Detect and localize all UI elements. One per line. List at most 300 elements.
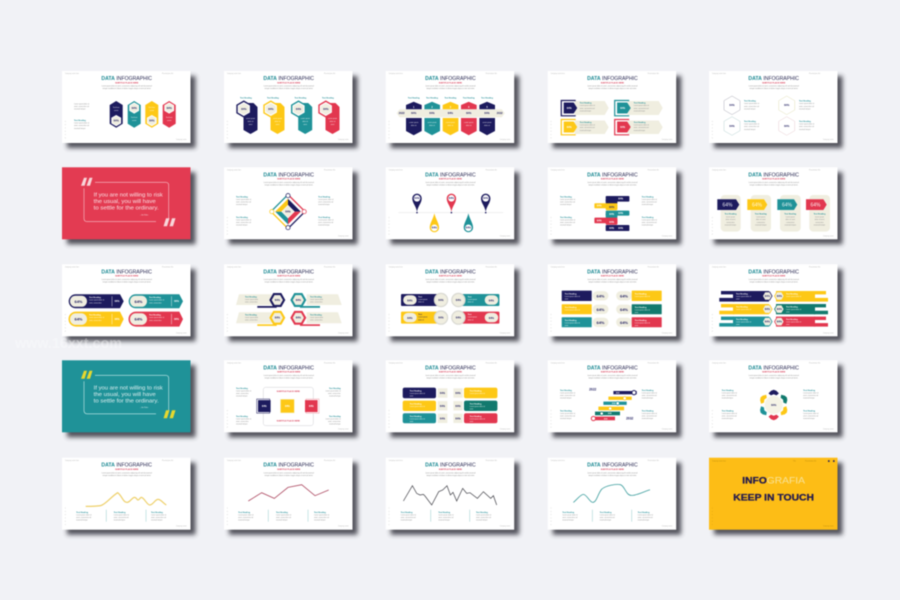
teal column: 2	[431, 106, 433, 109]
slide header: Lorem ipsum dolor sit amet, consectetur adipiscing elit sed do eiusmod	[587, 181, 638, 184]
text block top right: eiusmod tempor	[642, 203, 654, 206]
card teal: eiusmod tempor	[785, 224, 796, 227]
card yellow: consectetur	[757, 221, 765, 224]
diamond chart: 64%	[285, 210, 291, 214]
pill yellow: Lorem ipsum dolor sit	[89, 316, 105, 319]
right bars	[464, 388, 497, 423]
slide header: Company name here	[389, 459, 403, 462]
slide header: Presentation title	[809, 361, 820, 364]
item navy: Lorem ipsum dolor	[245, 299, 259, 301]
text column two: Text Heading	[276, 511, 289, 514]
text block top left: amet, consectetur ad	[722, 394, 737, 397]
left bars: Text Heading	[410, 402, 422, 405]
right bars: Lorem ipsum dolor sit	[786, 308, 802, 311]
bar red	[452, 311, 499, 324]
slide header	[227, 266, 349, 334]
text block bottom right: Lorem ipsum dolor sit	[325, 417, 341, 420]
slide header: SUBTITLE PLACE HERE	[439, 371, 463, 374]
red column	[461, 97, 477, 135]
text block bottom left: Lorem ipsum dolor sit	[722, 412, 737, 415]
hexagon item one	[724, 96, 760, 115]
slide header: SUBTITLE PLACE HERE	[601, 178, 625, 181]
text block bottom left: Lorem ipsum dolor sit	[236, 417, 252, 420]
bar yellow	[401, 311, 448, 324]
quote text: If you are not willing to risk	[94, 385, 163, 391]
hexagon item four: Lorem ipsum dolor sit	[799, 123, 815, 126]
slide: stair timeline	[548, 360, 681, 437]
line chart	[86, 493, 166, 506]
hexagon item two: 64%	[784, 103, 790, 107]
text block top right	[642, 389, 657, 400]
teal column: Lorem ipsum	[427, 122, 437, 124]
year labels: 2032	[497, 111, 503, 115]
card yellow: eiusmod tempor	[755, 224, 767, 227]
left percentages: 64%	[596, 320, 605, 325]
small header text: Company name	[823, 526, 834, 528]
quote text	[94, 192, 163, 216]
text column two	[592, 510, 615, 522]
card yellow: dolor sit amet	[756, 218, 766, 221]
right percentages	[453, 388, 463, 423]
slide header: Company name here	[712, 72, 726, 75]
slide header: SUBTITLE PLACE HERE	[601, 275, 625, 278]
right bars	[632, 291, 662, 327]
text column one: eiusmod tempor	[562, 519, 574, 522]
pin red: 64%	[449, 196, 455, 200]
yellow column: dolor sit	[448, 124, 454, 127]
item teal: 64%	[620, 107, 626, 110]
text column three: Lorem ipsum dolor sit	[476, 514, 492, 517]
bar yellow: 64%	[438, 315, 444, 319]
slide header: Lorem ipsum dolor sit amet, consectetur adipiscing elit sed do eiusmod	[749, 181, 799, 184]
column red	[318, 97, 340, 134]
slide header: tempor incididunt ut labore et dolore magna aliqua ut enim ad minim	[588, 376, 637, 379]
left bars: Lorem ipsum dolor sit	[736, 308, 752, 311]
text block bottom left: Text Heading	[236, 415, 249, 418]
text block bottom left: eiusmod tempor	[236, 224, 248, 227]
text column two: amet, consectetur ad	[600, 516, 615, 519]
pill navy: 64%	[74, 299, 83, 304]
column navy	[236, 97, 258, 134]
text column one: eiusmod tempor	[238, 519, 250, 522]
slide header: SUBTITLE PLACE HERE	[601, 468, 625, 471]
left bars: Lorem ipsum dolor sit	[410, 418, 425, 421]
slide: hexagon headed columns	[224, 71, 358, 148]
square red: 64%	[309, 405, 315, 408]
title: DATA INFOGRAPHIC	[425, 269, 476, 275]
slide header: Company name	[500, 526, 510, 528]
slide header: tempor incididunt ut labore et dolore magna aliqua ut enim ad minim	[588, 474, 637, 477]
slide header: Presentation title	[809, 72, 820, 75]
frame	[263, 387, 313, 426]
slide header: Company name	[823, 332, 834, 334]
slide: hexagon badges with bands	[224, 264, 358, 341]
pill teal: Lorem ipsum dolor sit	[149, 299, 165, 302]
slide header: Lorem ipsum dolor sit amet, consectetur adipiscing elit sed do eiusmod	[264, 278, 314, 281]
text block top right	[803, 389, 819, 400]
year labels	[399, 111, 503, 115]
right bars: Text Heading	[470, 415, 482, 418]
text block bottom right: Text Heading	[318, 216, 331, 219]
card yellow: Text Heading	[755, 212, 768, 215]
slide header: tempor incididunt ut labore et dolore magna aliqua ut enim ad minim	[750, 280, 798, 283]
slide header: Company name here	[712, 265, 726, 268]
text column one	[76, 511, 92, 522]
column red: Lorem ipsum	[328, 118, 338, 120]
slide header: tempor incididunt ut labore et dolore magna aliqua ut enim ad minim	[103, 474, 151, 477]
slide header	[551, 362, 672, 430]
text block bottom right: eiusmod tempor	[642, 224, 654, 227]
text column one	[238, 511, 254, 522]
title: DATA INFOGRAPHIC	[748, 269, 799, 275]
title: DATA INFOGRAPHIC	[425, 76, 476, 82]
slide header: Company name	[662, 235, 672, 237]
item navy: amet, consectetur ad	[580, 107, 595, 110]
title: DATA INFOGRAPHIC	[101, 76, 152, 82]
text block bottom left: amet, consectetur	[236, 420, 249, 423]
slide header: Company name	[338, 235, 349, 237]
hexagon item four: 64%	[784, 124, 790, 128]
slide header: Presentation title	[486, 361, 497, 364]
slide header	[227, 72, 349, 141]
right bars: Text Heading	[635, 319, 647, 322]
slide header: Presentation title	[324, 265, 335, 268]
hexagon item two	[779, 96, 815, 115]
title: DATA INFOGRAPHIC	[587, 76, 638, 82]
column yellow	[263, 97, 284, 134]
navy column two: 5	[486, 106, 488, 109]
square yellow: 64%	[285, 405, 291, 408]
hexagon item four: amet, consectetur ad	[799, 125, 814, 128]
text column two: eiusmod tempor	[438, 519, 450, 522]
text block top right: amet, consectetur	[328, 392, 341, 395]
text block top left: eiusmod tempor	[560, 397, 572, 400]
text column two: eiusmod tempor	[276, 519, 288, 522]
text block top right: eiusmod tempor	[329, 394, 341, 397]
slide header: Company name	[338, 428, 349, 430]
pill navy: amet, consectetur	[89, 301, 102, 304]
text block bottom right	[803, 409, 819, 420]
left bars: Lorem ipsum dolor sit	[565, 295, 580, 298]
text column three: eiusmod tempor	[638, 519, 650, 522]
slide header	[389, 266, 510, 334]
pin navy: 64%	[414, 196, 420, 200]
left bars: amet	[736, 297, 740, 300]
text block bottom right: Lorem ipsum dolor sit	[318, 218, 334, 221]
text column one: Text Heading	[401, 511, 413, 514]
text block top right: Lorem ipsum dolor sit	[803, 391, 819, 394]
slide header	[227, 459, 349, 528]
card yellow	[747, 195, 771, 232]
text block bottom left	[236, 415, 252, 425]
text block bottom right	[642, 409, 657, 420]
ribbon stack: 64%	[609, 213, 615, 216]
text column two: Text Heading	[438, 511, 451, 514]
text block top left	[722, 389, 737, 400]
text block bottom right: amet, consectetur ad	[642, 221, 657, 224]
slide header: Company name here	[227, 169, 241, 172]
text block top left: eiusmod tempor	[236, 394, 248, 397]
quote text	[94, 385, 163, 409]
text block top left: Text Heading	[236, 387, 249, 390]
slide header: Lorem ipsum dolor sit amet, consectetur adipiscing elit sed do eiusmod	[749, 374, 799, 377]
hexagon bars: 64%	[114, 118, 119, 122]
year labels: 2032	[626, 416, 633, 420]
slide header: SUBTITLE PLACE HERE	[277, 275, 301, 278]
bar teal	[452, 293, 499, 307]
text block bottom left	[560, 216, 576, 227]
text block bottom left: Text Heading	[722, 409, 734, 412]
left percentages: 64%	[440, 391, 446, 395]
item navy: Text Heading	[245, 295, 258, 298]
text block bottom left: eiusmod tempor	[560, 224, 572, 227]
text block bottom right: Text Heading	[803, 409, 816, 412]
yellow column: Lorem ipsum	[446, 122, 456, 124]
left percentages: 64%	[440, 416, 446, 420]
hexagon bars: Text here	[166, 116, 173, 119]
card red: consectetur	[815, 221, 824, 224]
ribbon stack: 64%	[618, 212, 624, 215]
column teal: Text Heading	[294, 97, 307, 100]
bar yellow: dolor sit	[418, 318, 424, 321]
hexagon bars: Text here	[149, 106, 155, 109]
ribbon stack: 64%	[609, 205, 615, 209]
hexagon item two: Text Heading	[799, 100, 812, 102]
text block bottom left: amet, consectetur ad	[236, 221, 251, 224]
hexagon bars: Lorem	[167, 120, 172, 122]
right bars: Text Heading	[786, 318, 799, 321]
pill red: Lorem ipsum dolor sit	[149, 316, 165, 319]
slide: red line chart	[224, 458, 358, 535]
contact dots	[828, 460, 835, 462]
hex badges: 64%	[777, 294, 783, 298]
year labels: 2022	[399, 111, 405, 115]
text block bottom right	[642, 216, 657, 227]
pill navy: Lorem ipsum dolor sit	[89, 299, 105, 302]
slide header: tempor incididunt ut labore et dolore magna aliqua ut enim ad minim	[426, 184, 475, 187]
hex badges: 64%	[777, 319, 783, 323]
title: DATA INFOGRAPHIC	[101, 269, 152, 275]
quote frame left	[84, 188, 156, 222]
text block bottom left	[236, 216, 252, 227]
left bars: Text Heading	[736, 292, 749, 295]
hex badges: 64%	[765, 319, 771, 323]
item yellow: amet, consectetur	[245, 318, 258, 321]
slide: bars with ring circles	[386, 264, 519, 341]
column teal: 64%	[296, 107, 302, 111]
slide header: Company name	[176, 332, 187, 334]
slide header: Company name here	[389, 72, 403, 75]
line chart	[248, 485, 329, 501]
pill yellow	[68, 312, 124, 327]
navy column: Lorem ipsum	[409, 122, 419, 124]
item yellow: Text Heading	[245, 313, 258, 316]
card red: dolor sit amet	[815, 218, 825, 221]
slide header: Company name here	[65, 265, 79, 268]
title: DATA INFOGRAPHIC	[425, 365, 476, 371]
item yellow	[561, 120, 609, 135]
text column three	[470, 510, 492, 522]
card navy: consectetur	[726, 221, 735, 224]
ribbon stack: 64%	[597, 205, 602, 208]
slide header: Company name	[823, 235, 834, 237]
text block top left: amet, consectetur ad	[236, 201, 251, 204]
title: DATA INFOGRAPHIC	[425, 463, 476, 469]
navy column two: 64%	[484, 111, 490, 115]
slide header: Lorem ipsum dolor sit amet, consectetur adipiscing elit sed do eiusmod	[264, 471, 314, 474]
text block top right: Lorem ipsum dolor sit	[325, 389, 341, 392]
item teal	[290, 293, 342, 308]
hexagon bars	[110, 101, 176, 128]
text column one: Text Heading	[238, 511, 251, 514]
slide header	[389, 168, 510, 237]
navy column: 64%	[411, 111, 417, 115]
teal column	[424, 97, 440, 135]
slide: outlined hexagons	[709, 71, 842, 148]
item teal: Lorem ipsum dolor sit	[634, 104, 649, 107]
text block bottom right: Lorem ipsum dolor sit	[803, 412, 819, 415]
slide header: Company name	[662, 428, 672, 430]
text block top right: Text Heading	[329, 387, 342, 390]
text block top left: amet, consectetur ad	[560, 201, 575, 204]
text block bottom left: amet, consectetur ad	[560, 221, 575, 224]
text block left: amet, consectetur ad	[74, 105, 89, 108]
slide header: Company name here	[551, 265, 565, 268]
slide: red quote	[62, 167, 196, 244]
right percentages: 64%	[455, 391, 461, 395]
navy column two: Lorem ipsum	[482, 122, 492, 124]
text column three: amet, consectetur ad	[151, 516, 166, 519]
text column two: Text Heading	[600, 511, 612, 514]
slide: staggered ribbons	[548, 167, 681, 244]
slide header: Presentation title	[486, 265, 497, 268]
pin yellow: 64%	[432, 226, 438, 230]
slide header: Presentation title	[648, 459, 659, 462]
hexagon item four	[779, 117, 815, 135]
card yellow: Lorem ipsum	[756, 216, 766, 218]
text column one: amet, consectetur ad	[401, 516, 416, 519]
slide header: Lorem ipsum dolor sit amet, consectetur adipiscing elit sed do eiusmod	[587, 85, 638, 88]
hexagon item three: amet, consectetur ad	[744, 125, 759, 128]
item yellow: eiusmod tempor	[580, 129, 592, 132]
text block top right: Text Heading	[642, 389, 654, 392]
yellow column: Text Heading	[445, 97, 457, 100]
slide header: Company name here	[227, 459, 241, 462]
text block bottom right: Lorem ipsum dolor sit	[642, 412, 657, 415]
slide header	[65, 459, 187, 528]
slide header: Lorem ipsum dolor sit amet, consectetur adipiscing elit sed do eiusmod	[587, 278, 638, 281]
left bars: Lorem ipsum dolor sit	[410, 405, 425, 408]
bar red: Lorem ipsum	[468, 317, 478, 319]
yellow column	[443, 97, 458, 135]
pill red: Text Heading	[149, 313, 162, 316]
text column one: Lorem ipsum dolor sit	[238, 514, 254, 517]
slide header: tempor incididunt ut labore et dolore magna aliqua ut enim ad minim	[265, 280, 313, 283]
quote text: If you are not willing to risk	[94, 192, 163, 198]
item red: Lorem ipsum dolor sit	[634, 124, 649, 127]
left bars: Text Heading	[565, 319, 577, 322]
right bars: amet	[470, 420, 474, 423]
text column two: Lorem ipsum dolor sit	[600, 514, 615, 517]
right bars: Text Heading	[635, 306, 647, 309]
item navy: eiusmod tempor	[580, 109, 592, 112]
text column three: amet, consectetur ad	[638, 516, 653, 519]
left bars	[562, 291, 592, 327]
text column one: eiusmod tempor	[401, 519, 413, 522]
slide header: Presentation title	[486, 459, 497, 462]
small header text: Company name here	[712, 459, 726, 462]
slide header: Company name	[500, 235, 510, 237]
item navy: 64%	[567, 107, 572, 110]
right bars: Lorem ipsum dolor sit	[786, 320, 802, 323]
slide header: Lorem ipsum dolor sit amet, consectetur adipiscing elit sed do eiusmod	[749, 85, 799, 88]
slide header: Company name	[662, 332, 672, 334]
right percentages: 64%	[620, 293, 628, 298]
left percentages: 64%	[596, 307, 605, 312]
text block bottom right: eiusmod tempor	[642, 417, 654, 420]
hexagon item four: Text Heading	[799, 120, 812, 123]
item red: Text Heading	[310, 313, 323, 316]
slide: six bars with percent blobs	[548, 264, 681, 341]
right bars: Text Heading	[470, 389, 482, 392]
slide header: Lorem ipsum dolor sit amet, consectetur adipiscing elit sed do eiusmod	[264, 85, 314, 88]
text column one: Lorem ipsum dolor sit	[562, 514, 578, 517]
slide header	[712, 266, 834, 334]
text column two: Text Heading	[114, 511, 126, 514]
quote text: to settle for the ordinary.	[94, 398, 159, 404]
text block left lower: Text Heading	[74, 119, 87, 122]
slide header: Company name here	[712, 169, 726, 172]
text block top left	[560, 195, 576, 206]
pill red: 64%	[174, 318, 180, 321]
item teal: Text Heading	[310, 295, 323, 298]
text column three	[632, 510, 653, 522]
slide header: Company name here	[389, 265, 403, 268]
slide header	[551, 266, 672, 334]
column red: amet	[331, 123, 335, 126]
pin navy two: 64%	[483, 196, 489, 200]
left bars: Lorem ipsum dolor sit	[565, 322, 580, 325]
hexagon item two: Lorem ipsum dolor sit	[799, 102, 815, 105]
red column: Lorem ipsum	[464, 122, 474, 124]
slide: bracket arrows	[548, 71, 681, 148]
hexagon bars: Lorem	[132, 120, 137, 122]
card teal: Text Heading	[784, 212, 797, 215]
slide header: Company name	[662, 139, 672, 141]
pill teal: amet, consectetur	[149, 301, 162, 304]
hexagon item three: Lorem ipsum dolor sit	[744, 123, 760, 126]
left percentages: 64%	[596, 293, 605, 298]
slide header: tempor incididunt ut labore et dolore magna aliqua ut enim ad minim	[426, 87, 475, 90]
slide header: SUBTITLE PLACE HERE	[601, 371, 625, 374]
slide header: Company name here	[712, 361, 726, 364]
slide header	[712, 168, 834, 237]
item navy	[236, 293, 285, 308]
text block top left: amet, consectetur ad	[560, 394, 575, 397]
pill yellow: Text Heading	[89, 313, 102, 316]
column navy: Text Heading	[240, 97, 253, 100]
text block top right: amet, consectetur ad	[642, 201, 657, 204]
slide header: tempor incididunt ut labore et dolore magna aliqua ut enim ad minim	[265, 376, 313, 379]
hexagon item three: 64%	[729, 124, 735, 128]
closing quote marks	[164, 218, 176, 226]
closing quote marks	[164, 410, 176, 418]
text block top left: eiusmod tempor	[236, 203, 248, 206]
stair bars: 2022	[616, 392, 620, 394]
title: DATA INFOGRAPHIC	[263, 76, 314, 82]
text column two: amet, consectetur ad	[276, 516, 291, 519]
hexagon item one: Lorem ipsum dolor sit	[744, 102, 760, 105]
